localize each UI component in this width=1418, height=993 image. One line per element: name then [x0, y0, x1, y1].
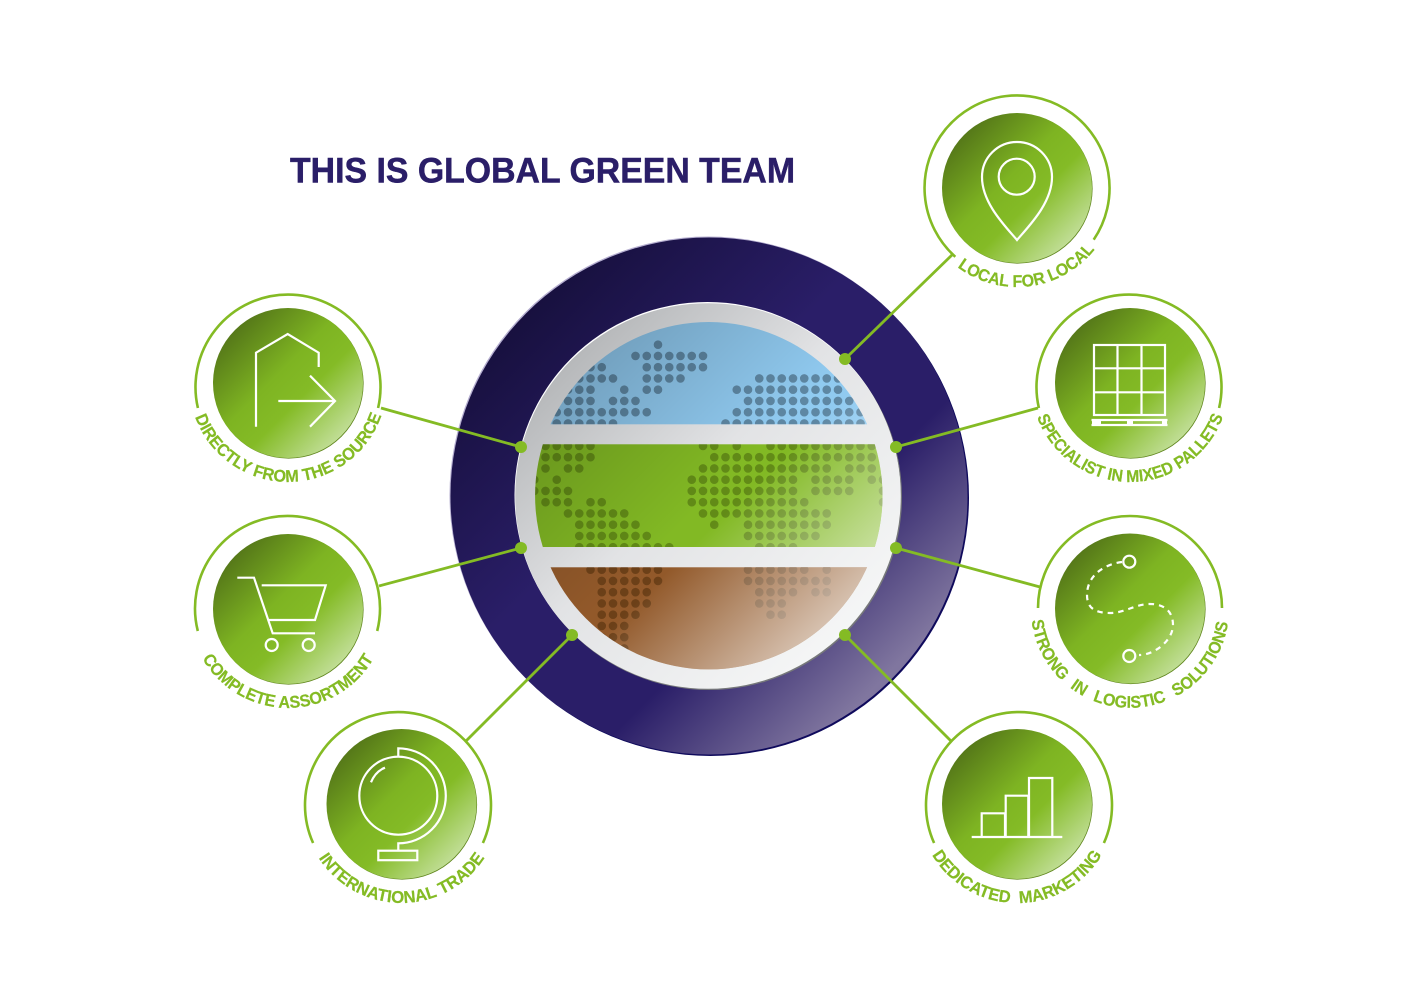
label: specialist in mixed pallets: SPECIALIST IN MIXED PALLETS	[1038, 414, 1222, 482]
icon: desk globe	[359, 748, 446, 860]
connector: dedicated marketing	[839, 629, 951, 741]
connector: complete assortment	[379, 542, 527, 586]
label: directly from the source: DIRECTLY FROM THE SOURCE	[195, 412, 382, 482]
label: local for local: LOCAL FOR LOCAL	[958, 246, 1095, 288]
connector: local for local	[839, 254, 953, 365]
label: international trade: INTERNATIONAL TRADE	[319, 852, 484, 904]
badge: local for local	[923, 94, 1111, 288]
badge: strong in logistic solutions	[1032, 514, 1228, 708]
label: dedicated marketing: DEDICATED MARKETING	[932, 849, 1100, 904]
icon: map pin	[982, 142, 1052, 240]
connector: specialist in mixed pallets	[890, 408, 1038, 453]
icon: dashed route	[1087, 556, 1173, 662]
label: complete assortment: COMPLETE ASSORTMENT	[204, 652, 372, 708]
badge: specialist in mixed pallets	[1035, 293, 1223, 482]
icon: shopping cart	[237, 578, 326, 651]
connector: strong in logistic solutions	[890, 542, 1040, 587]
badge: dedicated marketing	[924, 710, 1114, 904]
icon: pallet of boxes	[1092, 345, 1168, 425]
badge: international trade	[304, 710, 492, 904]
central globe badge	[450, 236, 969, 756]
badge: directly from the source	[194, 293, 382, 482]
connector: directly from the source	[381, 408, 527, 453]
label: strong in logistic solutions: STRONG IN LOGISTIC SOLUTIONS	[1032, 620, 1228, 708]
connector: international trade	[466, 629, 578, 741]
badge: complete assortment	[194, 514, 382, 708]
globe: sky band	[550, 322, 867, 424]
globe: soil band	[550, 567, 867, 670]
globe: grass band	[530, 444, 890, 547]
icon: bar chart	[972, 778, 1062, 837]
icon: warehouse with arrow	[256, 334, 335, 427]
title: THIS IS GLOBAL GREEN TEAM	[290, 152, 795, 190]
